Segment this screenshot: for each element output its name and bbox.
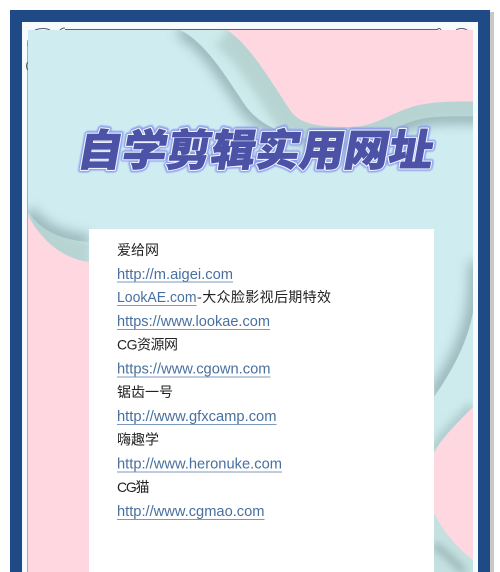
site name: LookAE: -大众脸影视后期特效 bbox=[197, 287, 331, 307]
link list bbox=[117, 240, 331, 520]
bottom right teal wave bbox=[434, 513, 473, 572]
url: lookae: https://www.lookae.com bbox=[117, 313, 270, 330]
site name: LookAE bbox=[117, 287, 331, 307]
url: cgown: https://www.cgown.com bbox=[117, 360, 270, 378]
url: aigei: http://m.aigei.com bbox=[117, 266, 233, 283]
outer teal wave layer bbox=[28, 30, 473, 453]
site name: 爱给网: 爱给网 bbox=[117, 240, 159, 260]
url: cgmao: http://www.cgmao.com bbox=[117, 503, 264, 520]
site name: 嗨趣学: 嗨趣学 bbox=[117, 430, 159, 450]
site name: 锯齿一号: 锯齿一号 bbox=[117, 382, 173, 402]
white content card bbox=[89, 229, 434, 572]
title bbox=[74, 117, 440, 178]
title white outline: 自学剪辑实用网址 bbox=[74, 117, 440, 178]
title outer glow: 自学剪辑实用网址 bbox=[74, 117, 440, 178]
inner cyan wave layer bbox=[28, 30, 473, 396]
url: gfxcamp: http://www.gfxcamp.com bbox=[117, 408, 276, 425]
site name: LookAE: LookAE.com bbox=[117, 289, 196, 306]
site name: CG猫: CG猫 bbox=[117, 479, 150, 495]
site name: CG资源网: CG资源网 bbox=[117, 336, 178, 352]
url: heronuke: http://www.heronuke.com bbox=[117, 456, 282, 472]
title fill: 自学剪辑实用网址 bbox=[74, 117, 440, 178]
